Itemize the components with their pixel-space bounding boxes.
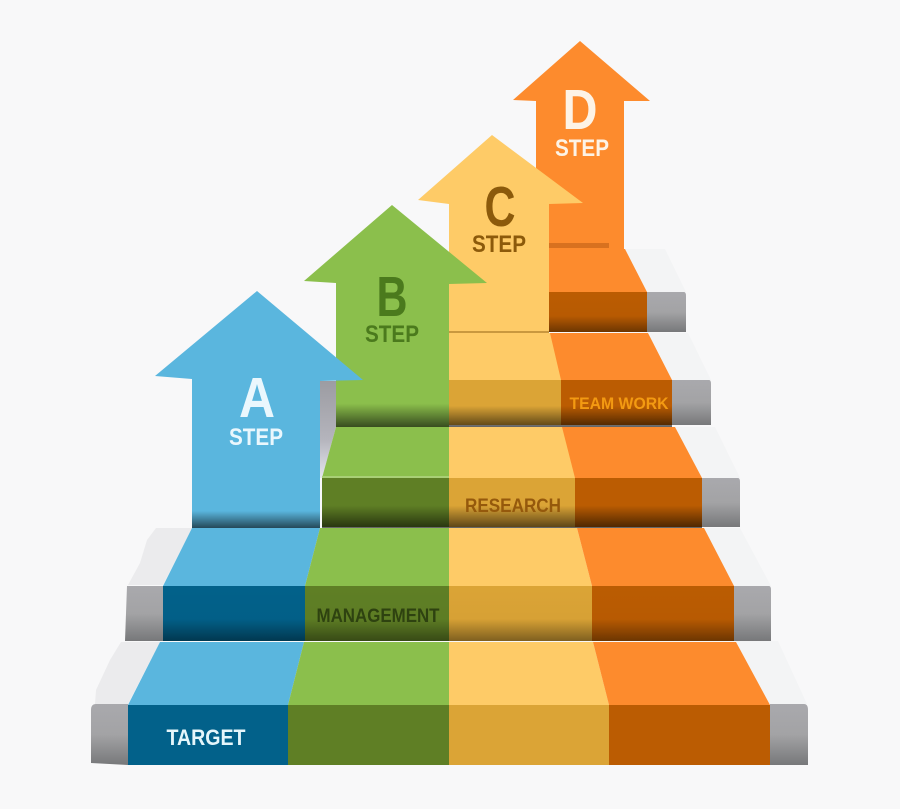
arrow A: A xyxy=(239,366,275,430)
label: management: MANAGEMENT xyxy=(316,606,440,627)
label: team work: TEAM WORK xyxy=(570,395,669,413)
label: research: RESEARCH xyxy=(465,496,561,517)
label: target: TARGET xyxy=(166,725,246,750)
step 4 xyxy=(449,333,711,427)
step 1 (bottom) xyxy=(91,641,808,765)
arrow B xyxy=(304,205,487,427)
arrow B: STEP xyxy=(365,321,419,348)
arrow D: STEP xyxy=(555,135,609,162)
arrow C: C xyxy=(484,175,516,239)
arrow B: B xyxy=(376,265,408,329)
gap between arrows A and B xyxy=(318,381,336,478)
arrow A: STEP xyxy=(229,424,283,451)
step 2 xyxy=(125,528,771,641)
step 3 xyxy=(322,427,740,528)
step 5 (top) xyxy=(549,249,686,332)
arrow D: D xyxy=(562,78,598,142)
arrow C xyxy=(418,135,583,333)
arrow A xyxy=(155,291,363,528)
arrow D xyxy=(513,41,650,249)
arrow C: STEP xyxy=(472,231,526,258)
